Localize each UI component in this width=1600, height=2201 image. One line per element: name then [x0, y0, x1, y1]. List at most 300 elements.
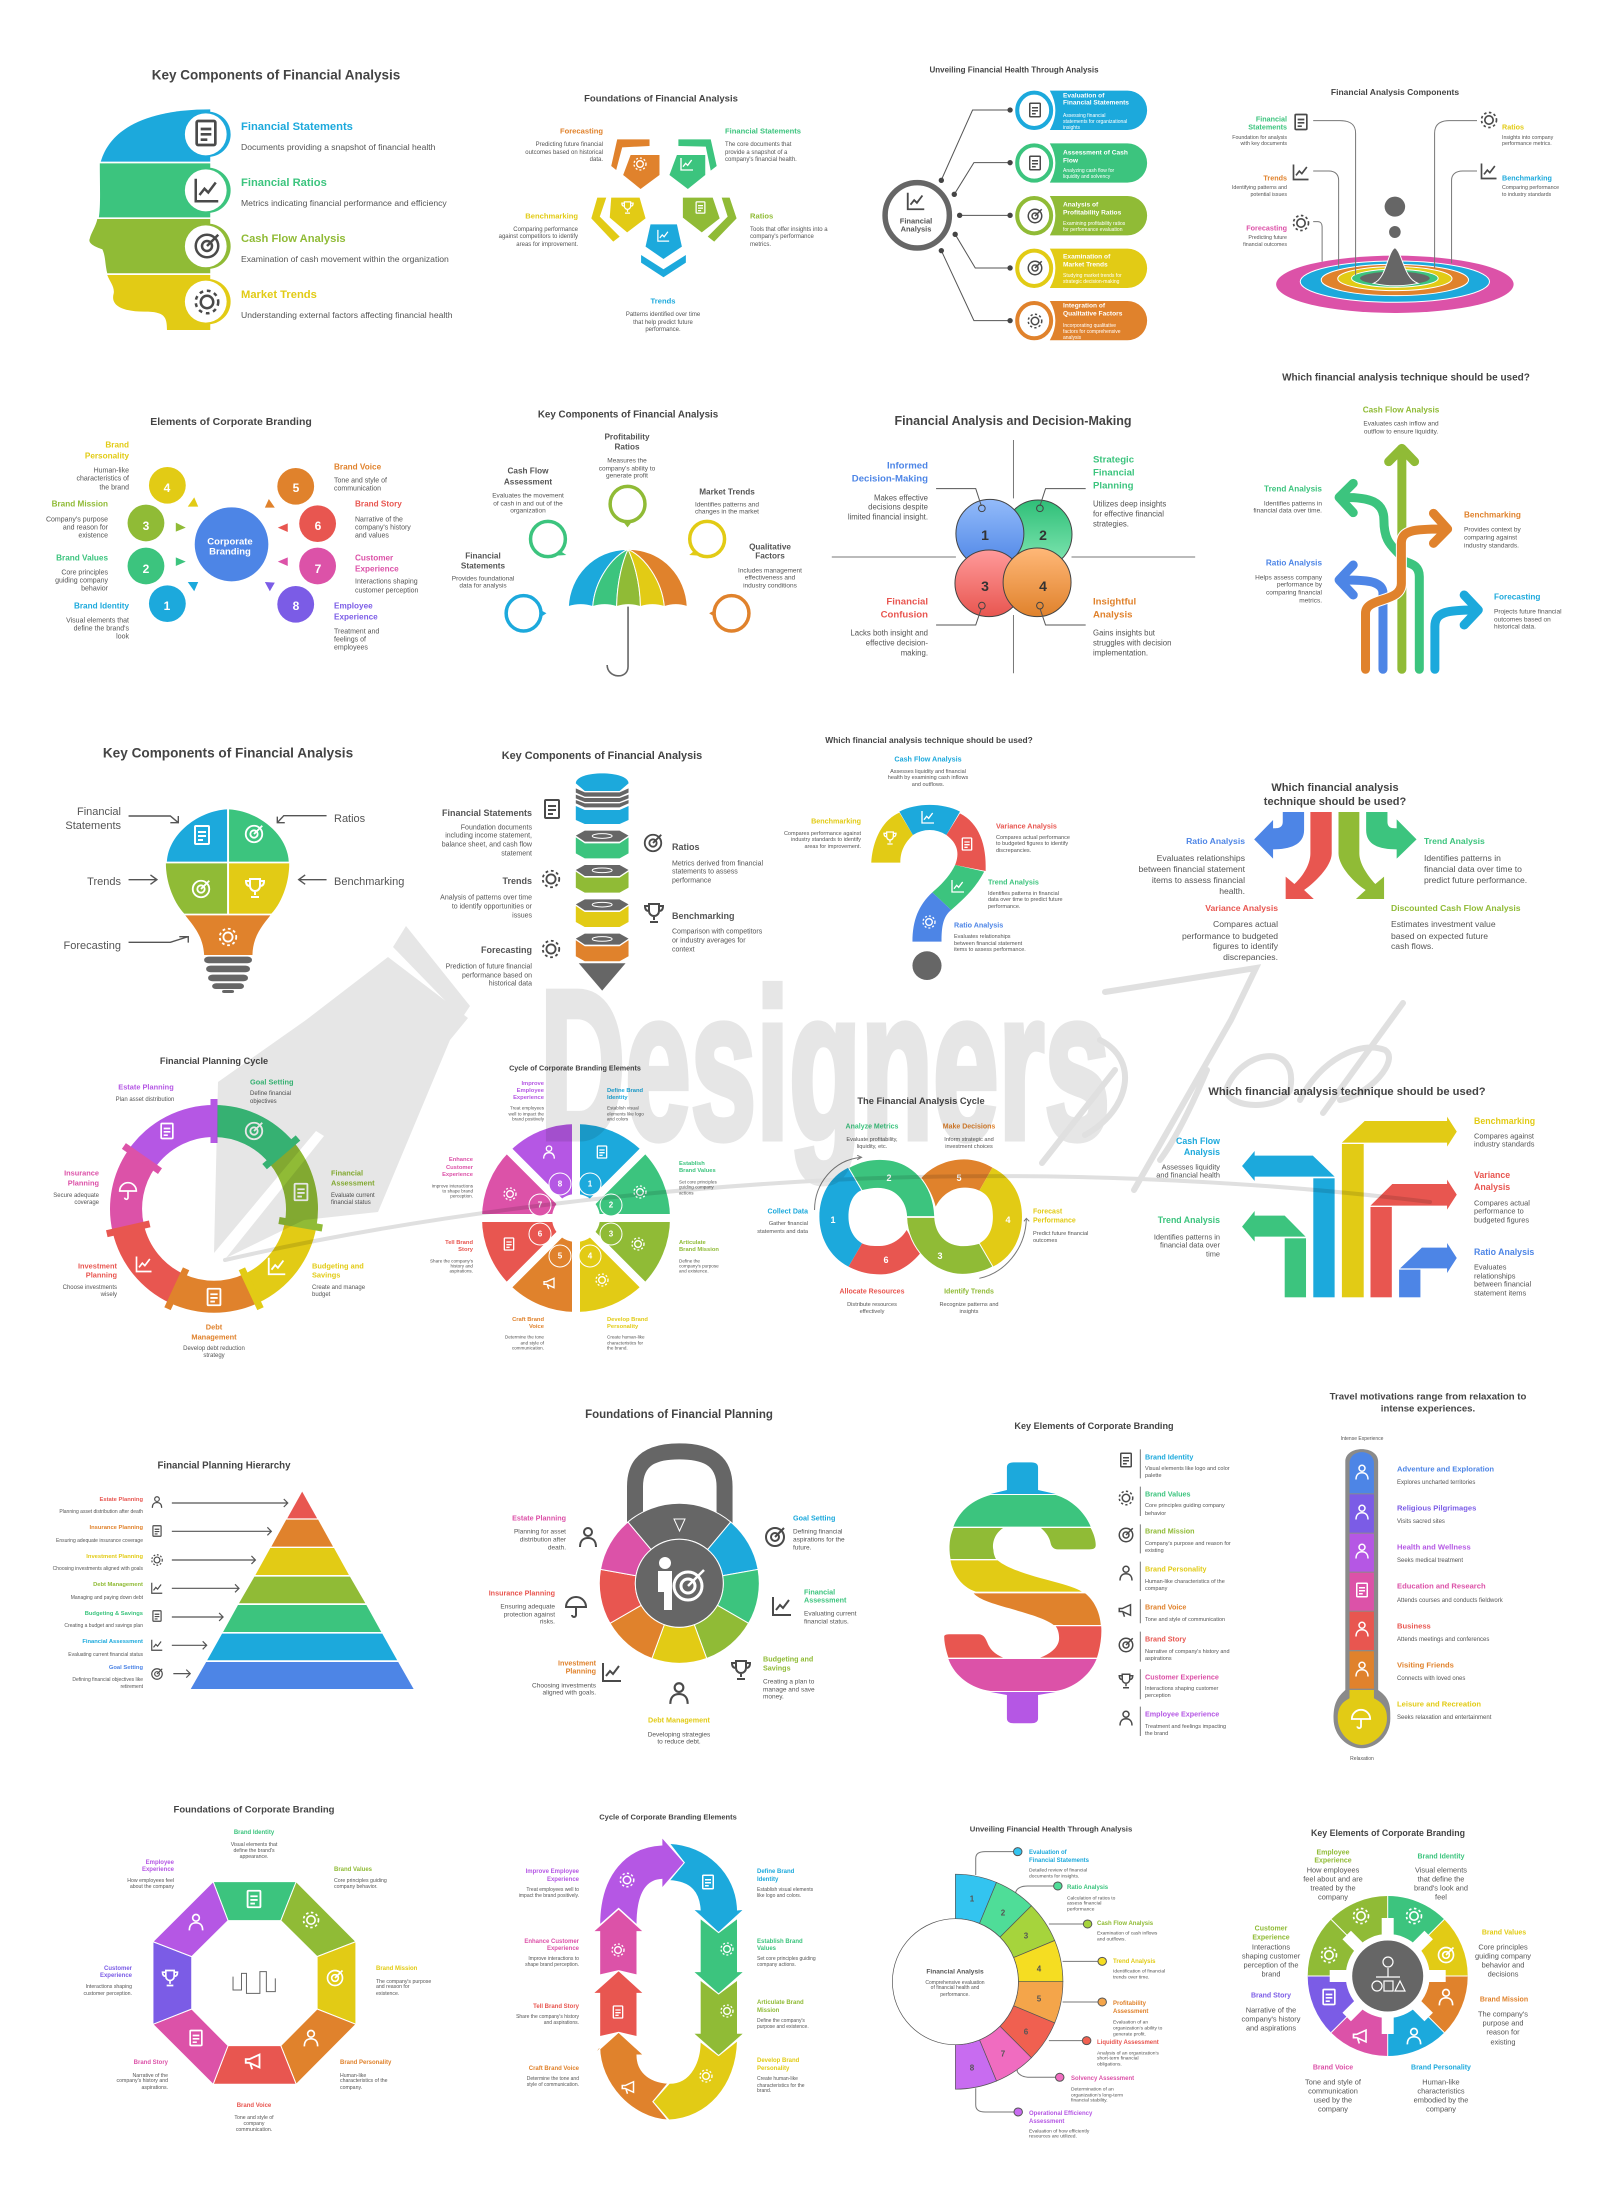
item: Tell Brand Story: and aspirations.: [544, 2020, 579, 2026]
item: Investment Planning: [532, 1658, 597, 1696]
infinity numbers: 5: [956, 1173, 962, 1183]
pie icons: [504, 1146, 646, 1289]
item: Variance Analysis: Variance: [1474, 1170, 1510, 1180]
item: Brand Mission: Brand Mission: [376, 1966, 418, 1972]
title: Elements of Corporate Branding: [150, 416, 312, 428]
item: Improve Employee Experience: Experience: [513, 1095, 545, 1101]
item: Brand Personality: Brand Personality: [340, 2060, 392, 2066]
gear ring icons: [1322, 1908, 1454, 2044]
item: Budgeting and Savings: Create and manage: [312, 1285, 366, 1291]
item: Brand Mission: and reason for: [376, 1984, 410, 1990]
item: Tell Brand Story: [430, 1240, 474, 1274]
item: Estate Planning: distribution after: [520, 1536, 567, 1544]
item: Market Trends: [241, 289, 453, 320]
wheel numbers: 8: [970, 2064, 975, 2072]
item: Brand Mission: Brand Mission: [1480, 1996, 1528, 2004]
item: Customer Experience: Experience: [1252, 1934, 1290, 1942]
item: Brand Story: and aspirations: [1246, 2024, 1296, 2032]
item: Allocate Resources: Distribute resources: [847, 1302, 897, 1308]
item: Brand Identity: define the brand's: [74, 626, 129, 632]
item: Debt Management: Management: [191, 1332, 237, 1342]
infinity numbers: 2: [886, 1173, 892, 1183]
item: Forecasting: outcomes based on: [1494, 616, 1551, 624]
item: Insurance Planning: coverage: [74, 1200, 100, 1206]
item: Brand Story: and values: [355, 532, 389, 540]
item: Financial Statements: [442, 808, 533, 858]
item: Discounted Cash Flow Analysis: based on expected future: [1391, 931, 1488, 941]
item: Brand Voice: Brand Voice: [1313, 2064, 1353, 2072]
pyramid labels: Estate Planning: [100, 1497, 143, 1503]
branding list: Treatment and feelings impacting: [1145, 1724, 1226, 1730]
circle numbers: 3: [981, 578, 989, 594]
stack icons: [543, 800, 663, 957]
pill text 1: insights: [1063, 125, 1080, 131]
item: Brand Story: Brand Story: [355, 500, 402, 508]
motivations list: Adventure and Exploration: [1397, 1464, 1494, 1474]
pie numbers: 7: [538, 1200, 543, 1210]
item: Trend Analysis: time: [1206, 1250, 1220, 1258]
item: Brand Values: Brand Values: [1482, 1930, 1526, 1936]
item: Improve Employee Experience: impact the brand positively.: [519, 1893, 579, 1899]
item: Brand Values: behavior: [81, 586, 109, 592]
item: Cash Flow Analysis: Cash Flow Analysis: [241, 233, 346, 245]
branding list: existing: [1145, 1548, 1164, 1554]
item: Budgeting and Savings: manage and save: [763, 1686, 815, 1694]
item: Forecast Performance: outcomes: [1033, 1238, 1057, 1244]
item: Trend Analysis: Identifies patterns in financial: [988, 891, 1059, 897]
item: Benchmarking: to industry standards: [1502, 192, 1552, 198]
pyramid labels: Choosing investments aligned with goals: [53, 1566, 143, 1572]
scale labels: [1341, 1436, 1384, 1762]
item: Cash Flow Analysis: Assesses liquidity and financial: [890, 769, 966, 775]
item: Qualitative Factors: industry conditions: [743, 582, 798, 590]
item: Market Trends: Market Trends: [699, 488, 755, 496]
item: Variance Analysis: Compares actual performance: [996, 835, 1070, 841]
item: Brand Mission: The company's purpose: [376, 1979, 431, 1985]
item: Establish Brand Values: Establish Brand: [757, 1939, 803, 1945]
item: Evaluation of Financial Statements: [1029, 1850, 1090, 1880]
item: Debt Management: Debt Management: [648, 1716, 711, 1724]
item: Benchmarking: [1474, 1116, 1535, 1148]
item: Employee Experience: [127, 1860, 175, 1890]
item: Insurance Planning: [53, 1168, 100, 1206]
branding list: Brand Identity: [1145, 1452, 1193, 1462]
pyramid icons: [152, 1497, 162, 1679]
loop icons: [612, 1873, 733, 2094]
item: Cash Flow Analysis: Cash Flow Analysis: [894, 754, 962, 764]
octagon icons: [162, 1891, 342, 2069]
item: Brand Voice: Tone and style of: [234, 2115, 274, 2121]
branding list: perception: [1145, 1693, 1171, 1699]
arrow loop: [593, 1837, 744, 2127]
item: Profitability Ratios: Ratios: [614, 442, 640, 452]
item: Establish Brand Values: [679, 1161, 717, 1196]
item: Brand Story: Brand Story: [134, 2060, 169, 2066]
item: Insurance Planning: [489, 1588, 555, 1626]
item: Forecasting: Forecasting: [560, 126, 603, 136]
title: Foundations of Corporate Branding: [174, 1804, 335, 1816]
item: Forecasting: Forecasting: [481, 945, 532, 955]
item: Customer Experience: [355, 554, 419, 594]
item: Benchmarking: or industry averages for: [672, 938, 746, 944]
item: Forecasting: data.: [590, 157, 603, 163]
item: Trends: Trends: [651, 296, 675, 306]
item: Ratio Analysis: items to assess performance.: [954, 947, 1026, 953]
bulb labels: Benchmarking: [334, 876, 404, 888]
icon: ratios: [696, 202, 705, 213]
branding list: the brand: [1145, 1731, 1168, 1737]
item: Brand Personality: [1411, 2064, 1471, 2114]
item: Employee Experience: Employee: [1316, 1850, 1350, 1856]
circle numbers: 1: [981, 527, 989, 543]
item: Brand Values: behavior and: [1482, 1960, 1524, 1970]
motivations list: Connects with loved ones: [1397, 1676, 1465, 1682]
item: Cash Flow Analysis: Examination of cash movement within the organization: [241, 254, 449, 264]
item: Benchmarking: areas for improvement.: [516, 242, 578, 248]
circle numbers: 6: [315, 519, 322, 533]
pill text 5: Integration of: [1063, 302, 1106, 310]
item: Strategic Financial Planning: Strategic: [1093, 454, 1135, 466]
item: Improve Employee Experience: well to impact the: [508, 1112, 544, 1116]
item: Tell Brand Story: Tell Brand: [445, 1240, 473, 1246]
item: Benchmarking: Benchmarking: [1474, 1116, 1535, 1126]
item: Ratio Analysis: [1067, 1885, 1116, 1912]
item: Investment Planning: [63, 1262, 118, 1298]
item: Financial Ratios: [241, 177, 447, 208]
item: Brand Story: Brand Story: [1251, 1992, 1291, 2000]
item: Variance Analysis: [996, 822, 1070, 854]
item: Trends: Trends: [1263, 174, 1287, 182]
motivations list: Visiting Friends: [1397, 1660, 1454, 1670]
thermometer icons: [1352, 1465, 1370, 1728]
center label: Financial Analysis: [926, 1968, 984, 1976]
branding list: Core principles guiding company: [1145, 1503, 1225, 1509]
item: Define Brand Identity: Establish visual: [607, 1106, 639, 1110]
item: Solvency Assessment: Solvency Assessment: [1071, 2076, 1134, 2082]
item: Cash Flow Analysis: [1363, 406, 1440, 436]
pyramid labels: Ensuring adequate insurance coverage: [56, 1538, 143, 1544]
item: Ratio Analysis: Ratio Analysis: [1474, 1247, 1534, 1257]
title: Financial Analysis and Decision-Making: [894, 414, 1132, 428]
item: Craft Brand Voice: Craft Brand Voice: [529, 2066, 580, 2072]
item: Craft Brand Voice: [527, 2066, 580, 2088]
item: Ratios: Tools that offer insights into a: [750, 227, 828, 233]
item: Financial Statements: Statements: [1248, 122, 1287, 132]
item: Brand Personality: characteristics of: [76, 476, 129, 482]
pill text 5: factors for comprehensive: [1063, 329, 1121, 335]
item: Articulate Brand Mission: Articulate: [679, 1240, 707, 1246]
item: Discounted Cash Flow Analysis: Estimates investment value: [1391, 919, 1496, 929]
item: Customer Experience: Customer: [1255, 1926, 1288, 1932]
item: Employee Experience: Employee: [334, 602, 373, 610]
item: Brand Identity: appearance.: [240, 1854, 268, 1860]
pie numbers: 8: [558, 1180, 563, 1188]
item: Insightful Analysis: Insightful: [1093, 596, 1136, 608]
item: Trends: issues: [512, 912, 532, 920]
motivations list: Business: [1397, 1622, 1431, 1630]
item: Improve Employee Experience: Experience: [547, 1877, 580, 1883]
item: Forecasting: Forecasting: [1246, 224, 1287, 232]
pill text 1: Financial Statements: [1063, 100, 1129, 106]
item: Enhance Customer Experience: perception.: [450, 1194, 473, 1198]
circle numbers: 4: [164, 481, 171, 495]
center label: performance.: [940, 1992, 970, 1998]
item: Profitability Ratios: generate profit: [606, 472, 648, 480]
item: Brand Personality: embodied by the: [1414, 2096, 1468, 2104]
item: Develop Brand Personality: characteristics for the: [757, 2083, 805, 2089]
item: Ratio Analysis: Evaluates relationships: [1157, 853, 1245, 863]
item: Financial Statements: data for analysis: [459, 582, 507, 590]
pyramid labels: Defining financial objectives like: [72, 1677, 143, 1683]
branding list: Visual elements like logo and color: [1145, 1466, 1230, 1472]
item: Qualitative Factors: Qualitative: [749, 542, 791, 552]
icons: ripple labels: [1294, 112, 1496, 230]
item: Insightful Analysis: Gains insights but: [1093, 628, 1156, 638]
item: Financial Statements: Provides foundational: [452, 576, 515, 582]
item: Budgeting and Savings: budget: [312, 1292, 331, 1298]
item: Enhance Customer Experience: Experience: [547, 1946, 580, 1952]
item: Customer Experience: Customer: [355, 554, 394, 562]
item: Develop Brand Personality: [607, 1317, 648, 1350]
pill text 3: Profitability Ratios: [1063, 210, 1122, 216]
four overlapping circles: [832, 440, 1195, 673]
item: Financial Statements: [1232, 114, 1287, 147]
item: Market Trends: [695, 488, 759, 516]
item: Articulate Brand Mission: Articulate Brand: [757, 2000, 804, 2006]
item: Brand Values: decisions: [1488, 1970, 1519, 1978]
motivations list: Health and Wellness: [1397, 1542, 1471, 1552]
panel: branding pie: [430, 1064, 719, 1350]
item: Brand Values: company behavior.: [334, 1884, 378, 1890]
branding list: Brand Values: [1145, 1490, 1191, 1498]
item: Brand Identity: [1414, 1854, 1468, 1902]
title: Financial Analysis Components: [1331, 87, 1459, 97]
item: Benchmarking: industry standards to identify: [791, 837, 861, 843]
item: Forecasting: Projects future financial: [1494, 608, 1562, 616]
item: Brand Story: Narrative of the: [1246, 2006, 1296, 2014]
title: Key Components of Financial Analysis: [502, 750, 702, 762]
item: Operational Efficiency Assessment: resources are utilized.: [1029, 2134, 1077, 2140]
item: Analyze Metrics: Analyze Metrics: [846, 1124, 899, 1130]
pyramid: [172, 1492, 414, 1689]
branding list: palette: [1145, 1473, 1162, 1479]
item: Brand Voice: company: [243, 2121, 265, 2127]
item: Benchmarking: industry standards: [1474, 1140, 1535, 1148]
item: Brand Personality: Brand Personality: [1411, 2064, 1471, 2072]
circle numbers: 1: [164, 599, 171, 613]
item: Employee Experience: [334, 602, 379, 652]
item: Ratios: Ratios: [672, 842, 700, 852]
item: Establish Brand Values: Set core principles guiding: [757, 1956, 816, 1962]
item: Insightful Analysis: implementation.: [1093, 648, 1148, 658]
item: Benchmarking: Benchmarking: [525, 212, 578, 220]
pill text 5: Qualitative Factors: [1063, 310, 1123, 318]
item: Goal Setting: [793, 1514, 845, 1552]
item: Ratio Analysis: Ratio Analysis: [1186, 836, 1245, 846]
item: Trend Analysis: trends over time.: [1113, 1974, 1149, 1980]
item: Brand Values: [55, 554, 109, 592]
item: Forecasting: historical data: [489, 980, 532, 988]
branding list: Company's purpose and reason for: [1145, 1541, 1231, 1547]
item: Profitability Ratios: Measures the: [607, 458, 647, 464]
item: Financial Assessment: [804, 1588, 857, 1626]
item: Craft Brand Voice: style of communication.: [527, 2082, 579, 2088]
item: Discounted Cash Flow Analysis: [1391, 903, 1521, 951]
item: Brand Story: Narrative of the: [133, 2073, 168, 2079]
wheel numbers: 3: [1024, 1932, 1029, 1940]
item: Financial Assessment: financial status.: [804, 1618, 849, 1626]
item: Ratio Analysis: Ratio Analysis: [954, 920, 1003, 930]
item: Cash Flow Analysis: Cash Flow: [1176, 1136, 1220, 1146]
item: Investment Planning: wisely: [100, 1292, 117, 1298]
item: Financial Assessment: Evaluating current: [804, 1610, 857, 1618]
item: Cash Flow Assessment: Assessment: [504, 478, 552, 486]
shackle: [635, 1451, 725, 1523]
item: Informed Decision-Making: limited financial insight.: [848, 512, 928, 522]
item: Cash Flow Assessment: [492, 466, 564, 514]
infinity numbers: 6: [883, 1255, 889, 1265]
item: Cash Flow Analysis: and financial health: [1156, 1170, 1220, 1180]
item: Brand Personality: company: [1426, 2104, 1456, 2114]
wheel numbers: 1: [970, 1894, 975, 1904]
item: Cash Flow Analysis: and outflows.: [1097, 1936, 1126, 1942]
hub label: Corporate: [207, 536, 253, 548]
panel: question mark: [784, 735, 1070, 980]
item: Develop Brand Personality: the brand.: [607, 1346, 628, 1350]
pill text 1: [1063, 92, 1129, 131]
item: Market Trends: Understanding external factors affecting financial health: [241, 310, 453, 320]
item: Trends: [1232, 174, 1287, 198]
item: Financial Statements: [725, 126, 801, 163]
circle numbers: [143, 481, 322, 613]
circle numbers: 2: [143, 562, 150, 576]
item: Craft Brand Voice: Voice: [529, 1324, 545, 1330]
center label: [925, 1968, 985, 1998]
item: Trend Analysis: [1253, 484, 1322, 514]
item: Trend Analysis: Trend Analysis: [988, 878, 1039, 886]
item: Solvency Assessment: financial stability.: [1071, 2098, 1108, 2104]
item: Budgeting and Savings: [763, 1654, 815, 1700]
item: Goal Setting: Goal Setting: [793, 1514, 835, 1522]
item: Estate Planning: [116, 1082, 174, 1103]
icon: forecasting: [634, 158, 646, 170]
center label: Comprehensive evaluation: [925, 1980, 985, 1986]
item: Strategic Financial Planning: Financial: [1093, 468, 1135, 478]
item: Brand Voice: communication: [1308, 2086, 1358, 2096]
icon: statements: [681, 158, 693, 170]
item: Trend Analysis: data over time to predict future: [988, 897, 1063, 903]
item: Employee Experience: How employees feel: [127, 1878, 174, 1884]
item: Benchmarking: [784, 816, 861, 850]
item: Forecast Performance: Performance: [1033, 1218, 1076, 1224]
title: Travel motivations range from relaxation to: [1330, 1392, 1526, 1402]
item: Brand Voice: [234, 2103, 274, 2133]
pill text 4: [1063, 254, 1122, 285]
item: Investment Planning: Planning: [86, 1270, 117, 1280]
title: Cycle of Corporate Branding Elements: [509, 1064, 641, 1072]
hub and pills: [885, 91, 1147, 340]
infinity numbers: [830, 1173, 1011, 1265]
infinity numbers: 4: [1005, 1215, 1011, 1225]
item: Define Brand Identity: Identity: [607, 1095, 628, 1101]
item: Make Decisions: Make Decisions: [943, 1124, 995, 1130]
item: Benchmarking: Benchmarking: [1464, 510, 1521, 520]
item: Solvency Assessment: Determination of an: [1071, 2086, 1114, 2092]
item: Articulate Brand Mission: Brand Mission: [679, 1247, 719, 1253]
hub label: Branding: [209, 546, 251, 558]
item: Enhance Customer Experience: [432, 1157, 474, 1198]
item: Brand Personality: Human-like: [1422, 2078, 1460, 2086]
item: Forecasting: Predicting future: [1248, 235, 1287, 241]
item: Brand Identity: feel: [1435, 1892, 1447, 1902]
item: Brand Voice: Brand Voice: [237, 2103, 272, 2109]
item: Cash Flow Analysis: [888, 754, 968, 788]
item: Ratios: Ratios: [1502, 122, 1524, 132]
item: Insightful Analysis: [1093, 596, 1171, 658]
item: Articulate Brand Mission: Define the: [679, 1258, 700, 1264]
circle numbers: 3: [143, 519, 150, 533]
pill text 5: Incorporating qualitative: [1063, 323, 1116, 329]
item: Make Decisions: [943, 1124, 995, 1150]
umbrella graphic: [506, 486, 749, 676]
item: Brand Values: Core principles guiding: [334, 1878, 387, 1884]
item: Brand Identity: Visual elements that: [66, 618, 129, 624]
branding list: [1145, 1452, 1231, 1737]
pyramid labels: Debt Management: [93, 1582, 143, 1588]
item: Develop Brand Personality: Develop Brand: [607, 1317, 648, 1323]
item: Insurance Planning: Planning: [68, 1178, 99, 1188]
item: Liquidity Assessment: obligations.: [1097, 2062, 1122, 2068]
item: Variance Analysis: performance to: [1474, 1206, 1524, 1216]
title: Foundations of Financial Planning: [585, 1409, 773, 1421]
item: Cash Flow Analysis: Cash Flow Analysis: [1097, 1921, 1154, 1927]
item: Trends: Identifying patterns and: [1232, 185, 1287, 191]
item: Liquidity Assessment: Liquidity Assessment: [1097, 2040, 1159, 2046]
item: Forecasting: Predicting future financial: [536, 142, 603, 148]
pill text 5: analysis: [1063, 335, 1082, 341]
pill text 1: Assessing financial: [1063, 113, 1106, 119]
item: Customer Experience: Experience: [355, 564, 399, 574]
puzzle icons: [884, 811, 972, 928]
item: Forecast Performance: Predict future financial: [1033, 1231, 1088, 1237]
pyramid labels: Investment Planning: [86, 1554, 143, 1560]
item: Variance Analysis: Variance Analysis: [1205, 903, 1278, 913]
item: Define Brand Identity: like logo and colors.: [757, 1893, 801, 1899]
item: Variance Analysis: discrepancies.: [996, 848, 1032, 854]
item: Craft Brand Voice: Determine the tone and: [527, 2076, 579, 2082]
item: Identify Trends: [939, 1288, 999, 1315]
panel: umbrella: [452, 410, 802, 676]
item: Financial Statements: with key documents: [1240, 141, 1287, 147]
item: Budgeting and Savings: [312, 1262, 366, 1298]
motivations list: Explores uncharted territories: [1397, 1480, 1475, 1486]
motivations list: [1397, 1464, 1504, 1721]
item: Benchmarking: Benchmarking: [1502, 174, 1552, 182]
item: Customer Experience: perception of the: [1243, 1960, 1299, 1970]
item: Investment Planning: Choose investments: [63, 1285, 117, 1291]
item: Ratio Analysis: between financial: [1474, 1280, 1531, 1288]
pill text 2: Analyzing cash flow for: [1063, 168, 1114, 174]
item: Trends: [440, 876, 533, 920]
item: Ratios: [672, 842, 763, 884]
hub label: Financial: [900, 216, 932, 226]
item: Brand Mission: existence: [78, 532, 108, 540]
item: Brand Identity: Brand Identity: [234, 1830, 275, 1836]
branding icons: [1119, 1453, 1133, 1726]
pyramid labels: Evaluating current financial status: [68, 1652, 143, 1658]
item: Develop Brand Personality: Create human-like: [757, 2076, 798, 2082]
pyramid labels: Goal Setting: [109, 1665, 143, 1671]
